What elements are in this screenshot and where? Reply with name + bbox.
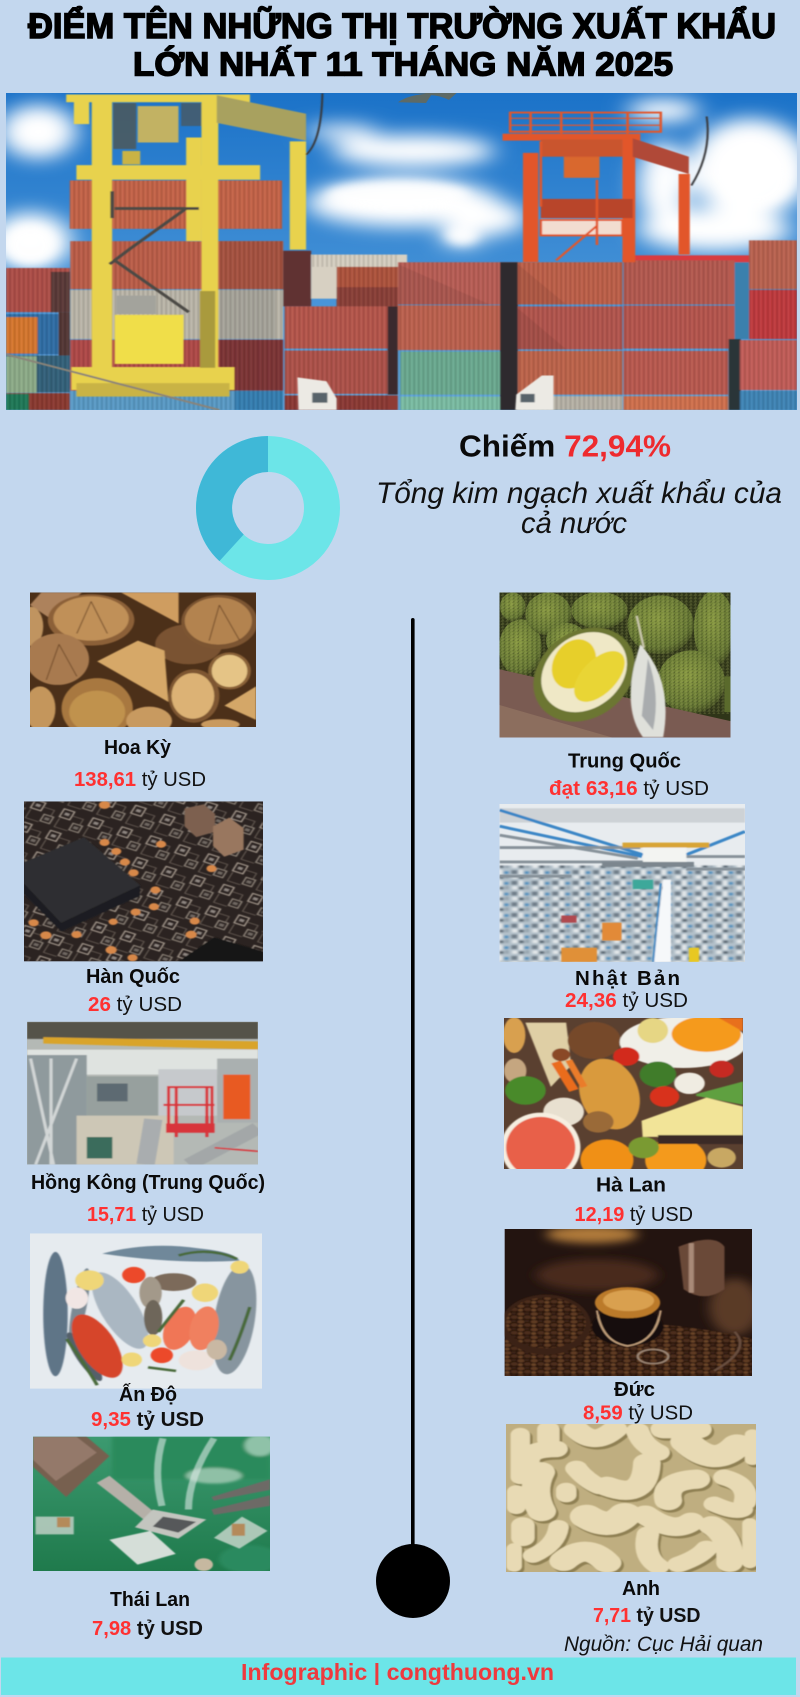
hero photo: container port with cranes <box>6 93 797 410</box>
label: Hà Lan <box>596 1174 666 1196</box>
footer bar: Infographic | congthuong.vn <box>241 1659 554 1685</box>
photo: coffee <box>504 1229 752 1376</box>
photo: seafood <box>30 1234 262 1388</box>
value: 7,98 tỷ USD <box>92 1617 203 1640</box>
timeline with end dot <box>376 618 450 1618</box>
label: Ấn Độ <box>119 1383 177 1406</box>
label: Thái Lan <box>110 1588 190 1611</box>
label: Đức <box>614 1378 655 1401</box>
label: Hàn Quốc <box>86 965 180 988</box>
label: Trung Quốc <box>568 750 681 772</box>
photo: cashew nuts <box>506 1424 756 1572</box>
label: Hoa Kỳ <box>104 736 172 759</box>
photo: food spread <box>504 1018 743 1169</box>
share description <box>376 477 782 540</box>
orange crane <box>503 113 708 262</box>
value: 8,59 tỷ USD <box>583 1402 693 1425</box>
share headline: Chiếm 72,94% <box>459 428 671 464</box>
trucks <box>297 375 554 410</box>
photo: circuit board chip <box>24 801 263 962</box>
photo: industrial plant <box>27 1022 258 1164</box>
value: 12,19 tỷ USD <box>574 1203 693 1226</box>
value: 24,36 tỷ USD <box>565 989 688 1012</box>
plane <box>398 93 457 103</box>
value: đạt 63,16 tỷ USD <box>549 777 709 800</box>
title: LỚN NHẤT 11 THÁNG NĂM 2025 <box>133 46 673 84</box>
share description: cả nước <box>521 507 627 540</box>
photo: soldering circuit board <box>33 1436 270 1571</box>
container stacks <box>6 181 797 410</box>
donut chart: 72,94% <box>196 436 322 562</box>
photo: factory floor <box>500 804 745 962</box>
value: 138,61 tỷ USD <box>74 768 206 791</box>
label: Hồng Kông (Trung Quốc) <box>31 1171 265 1194</box>
value: 7,71 tỷ USD <box>593 1604 700 1627</box>
item: Thái Lan <box>33 1435 280 1640</box>
footer bar <box>1 1658 796 1695</box>
title: ĐIỂM TÊN NHỮNG THỊ TRƯỜNG XUẤT KHẨU <box>28 6 776 46</box>
label: Nhật Bản <box>575 967 680 990</box>
item: Hà Lan <box>501 1016 747 1226</box>
item: Nhật Bản <box>500 804 745 1012</box>
item: Anh <box>506 1424 756 1627</box>
label: Anh <box>622 1577 660 1600</box>
item: Hồng Kông <box>27 1022 265 1226</box>
source note: Nguồn: Cục Hải quan <box>564 1633 763 1656</box>
title <box>28 6 776 84</box>
item: Đức <box>501 1225 760 1425</box>
value: 15,71 tỷ USD <box>87 1203 204 1226</box>
item: Hoa Kỳ <box>19 592 258 791</box>
photo: durian <box>500 592 730 738</box>
value: 26 tỷ USD <box>88 993 182 1016</box>
item: Ấn Độ <box>30 1233 263 1431</box>
photo: wood logs <box>30 592 256 727</box>
yellow crane <box>6 93 322 410</box>
value: 9,35 tỷ USD <box>91 1408 204 1431</box>
item: Trung Quốc <box>499 591 735 800</box>
item: Hàn Quốc <box>24 801 263 1016</box>
share description: Tổng kim ngạch xuất khẩu của <box>376 477 782 510</box>
